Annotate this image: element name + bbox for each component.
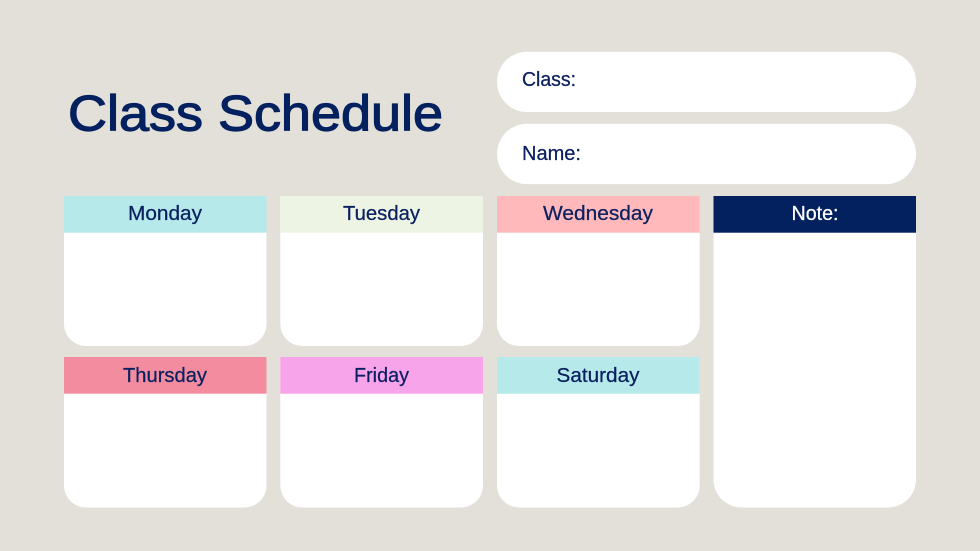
panel: Tuesday: Tuesday xyxy=(343,203,420,225)
field: name: Name: xyxy=(522,143,581,165)
field: class: Class: xyxy=(522,69,576,91)
panel: Saturday xyxy=(497,357,700,508)
panel: Friday: Friday xyxy=(354,365,409,387)
field: class xyxy=(497,52,916,112)
panel: Wednesday xyxy=(497,196,700,346)
panel: Tuesday xyxy=(280,196,483,346)
panel: Monday xyxy=(64,196,266,346)
panel: Note xyxy=(714,196,916,508)
panel: Note: Note: xyxy=(792,203,838,225)
panel: Wednesday: Wednesday xyxy=(543,203,653,225)
panel: Thursday: Thursday xyxy=(123,365,207,387)
panel: Friday xyxy=(280,357,483,508)
panel: Monday: Monday xyxy=(128,203,202,225)
field: name xyxy=(497,124,916,184)
panel: Saturday: Saturday xyxy=(556,365,640,387)
panel: Thursday xyxy=(64,357,266,508)
title: Class Schedule xyxy=(68,86,443,142)
